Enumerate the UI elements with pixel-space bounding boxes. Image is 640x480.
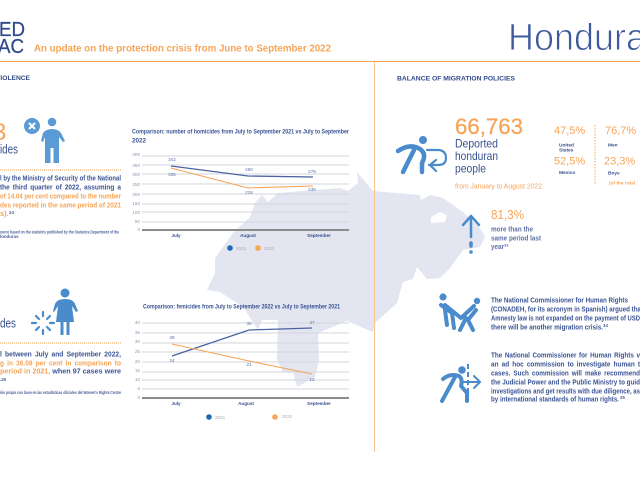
- text: CONADEH argument: [491, 296, 640, 332]
- boys share: [604, 156, 635, 176]
- femicides line chart: 35: [135, 330, 140, 335]
- femicides line chart: 5: [137, 386, 140, 391]
- homicides line chart: September: [307, 233, 331, 238]
- femicides body text: [0, 350, 121, 382]
- femicides source note: ión propia con base en las estadísticas oficiales del Women's Rights Centre: [0, 390, 121, 395]
- homicides line chart: 2022: [264, 246, 275, 251]
- homicides line chart: 235: [308, 187, 316, 192]
- homicides body text: the third quarter of 2022, assuming a: [0, 182, 122, 192]
- text: ad hoc commission: 35: [620, 395, 625, 400]
- icon: two people pushing: [439, 293, 480, 330]
- panel: destination and gender percentages: [554, 125, 636, 186]
- homicides source note: ource based on the statistics published by the Statistics Department of the: [0, 230, 119, 234]
- femicides line chart: 24: [169, 358, 175, 363]
- homicides line chart: August: [240, 233, 256, 238]
- femicides label: des: [0, 316, 16, 330]
- femicides line chart: 40: [135, 320, 140, 325]
- homicides line chart: 100: [132, 210, 140, 215]
- text: CONADEH argument: there will be another migration crisis.: [491, 322, 603, 332]
- subtitle: An update on the protection crisis from June to September 2022: [34, 44, 331, 54]
- homicides body text: of 14.04 per cent compared to the number: [0, 192, 121, 200]
- Mexico share: [554, 156, 585, 176]
- text: CONADEH argument: 34: [603, 323, 608, 328]
- icon: up arrow: [463, 216, 479, 254]
- increase text: year: [491, 244, 504, 251]
- icon: man with cross: [24, 118, 65, 163]
- femicides body text: .25: [0, 377, 7, 382]
- chart title: 2022: [132, 138, 146, 144]
- femicides body text: period in 2021, when 97 cases were: [0, 366, 121, 376]
- chart: homicides comparison: [132, 128, 349, 251]
- homicides source note: londuras: [0, 234, 19, 239]
- dotted divider: [594, 125, 596, 185]
- increase percentage: 81,3%: [491, 207, 524, 222]
- increase text: more than the: [491, 226, 533, 234]
- header rule: [0, 61, 640, 62]
- icon: deported person: [398, 136, 446, 172]
- homicides line chart: 0: [137, 227, 140, 232]
- deported label: people: [455, 162, 486, 176]
- femicides line chart: 10: [135, 377, 140, 382]
- homicides body text: [0, 174, 122, 218]
- homicides line chart: 278: [308, 169, 316, 174]
- background map of Honduras: [207, 172, 485, 387]
- homicides body text: l by the Ministry of Security of the National: [0, 174, 121, 182]
- homicides line chart: 400: [132, 152, 140, 157]
- homicides line chart: 342: [168, 157, 176, 162]
- homicides line chart: 250: [132, 182, 140, 187]
- homicides line chart: 350: [132, 163, 140, 168]
- section heading: balance of migration policies: BALANCE OF MIGRATION POLICIES: [397, 76, 515, 82]
- homicides line chart: 290: [245, 167, 253, 172]
- panel: femicides summary: [0, 316, 121, 395]
- column divider: [374, 62, 375, 452]
- dotted separator: [0, 169, 121, 171]
- logo: [0, 19, 25, 58]
- femicides line chart: [135, 320, 349, 420]
- femicides line chart: September: [307, 401, 331, 406]
- femicides line chart: 12: [309, 377, 315, 382]
- Mexico share: 52,5%: [554, 156, 585, 168]
- panel: deported figures: [455, 114, 542, 190]
- deported period: from January to August 2022: [455, 182, 542, 190]
- deported total: 66,763: [455, 114, 523, 139]
- femicides line chart: 20: [135, 359, 140, 364]
- chart: femicides comparison: [135, 304, 349, 420]
- dotted separator: [0, 342, 121, 344]
- homicides line chart: 50: [135, 219, 140, 224]
- boys share: Boys: [608, 170, 620, 176]
- homicides body text: 24: [9, 210, 14, 215]
- homicides label: ides: [0, 142, 18, 156]
- men share: Men: [608, 142, 618, 148]
- femicides line chart: August: [238, 401, 254, 406]
- United States share: States: [559, 148, 574, 154]
- total note: (of the total: [609, 180, 635, 186]
- homicides source note: [0, 230, 119, 239]
- femicides line chart: 2021: [215, 415, 226, 420]
- femicides line chart: 25: [135, 349, 140, 354]
- homicides line chart: 2021: [236, 246, 247, 251]
- deported label: Deported: [455, 136, 498, 150]
- femicides line chart: 2022: [282, 414, 293, 419]
- icon: woman with burst: [32, 288, 78, 335]
- homicides line chart: 300: [132, 172, 140, 177]
- panel: increase figure: [491, 207, 542, 251]
- homicides line chart: 228: [245, 190, 253, 195]
- homicides line chart: July: [171, 233, 181, 238]
- femicides line chart: 37: [309, 320, 315, 325]
- Mexico share: Mexico: [559, 170, 575, 176]
- chart title: Comparison: number of homicides from July to September 2021 vs July to September: [132, 128, 349, 136]
- men share: [605, 125, 636, 148]
- chart title: Comparison: femicides from July to September 2022 vs July to September 2021: [143, 304, 340, 310]
- homicides line chart: [132, 152, 349, 251]
- femicides body text: l between July and September 2022,: [0, 350, 121, 358]
- chart title: [132, 128, 349, 144]
- femicides line chart: 0: [137, 395, 140, 400]
- increase text: 33: [504, 242, 509, 248]
- femicides line chart: 36: [246, 321, 252, 326]
- increase text: same period last: [491, 236, 542, 242]
- femicides line chart: 21: [246, 362, 252, 367]
- femicides line chart: 28: [169, 335, 175, 340]
- men share: 76,7%: [605, 125, 636, 137]
- United States share: 47,5%: [554, 125, 585, 137]
- United States share: [554, 125, 585, 154]
- femicides body text: g in 36.08 per cent in comparison to: [0, 358, 121, 368]
- deported label: [455, 136, 498, 176]
- United States share: United: [559, 142, 574, 148]
- boys share: 23,3%: [604, 156, 635, 168]
- homicides line chart: 335: [168, 172, 176, 177]
- icon: person crossing border: [442, 364, 480, 401]
- homicides line chart: 200: [132, 192, 140, 197]
- increase text: [491, 226, 542, 251]
- femicides line chart: July: [171, 401, 181, 406]
- text: ad hoc commission: [491, 350, 640, 404]
- homicides body text: s).: [0, 209, 9, 218]
- femicides line chart: 30: [135, 339, 140, 344]
- homicides line chart: 150: [132, 201, 140, 206]
- panel: homicides summary: [0, 119, 122, 239]
- deported label: honduran: [455, 149, 498, 163]
- femicides line chart: 15: [135, 368, 140, 373]
- homicides body text: des reported in the same period of 2021: [0, 200, 121, 210]
